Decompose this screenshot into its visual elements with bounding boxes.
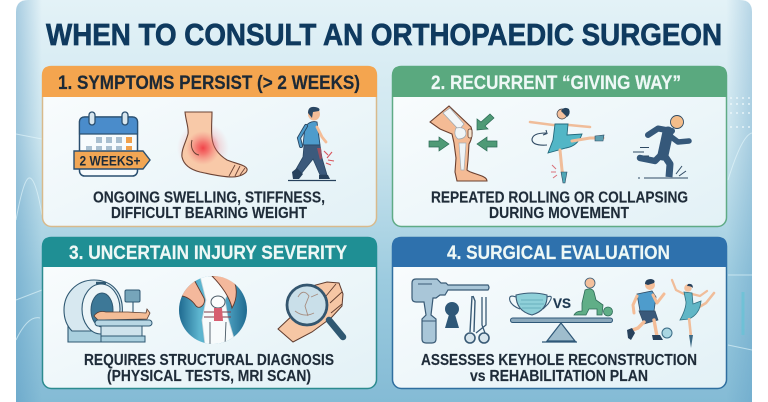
panel: surgical evaluation	[392, 237, 727, 388]
text: panel 2 caption	[431, 190, 688, 222]
icon: calendar	[74, 112, 150, 176]
heading: panel 4	[392, 237, 727, 267]
text: panel 1 caption: DIFFICULT BEARING WEIGHT	[111, 205, 307, 222]
icon: dancer	[672, 280, 714, 348]
icon: seesaw mask vs rehabilitation: VS	[553, 296, 571, 311]
heading: panel 1: 1. SYMPTOMS PERSIST (> 2 WEEKS)	[58, 72, 360, 94]
heading: panel 3	[42, 237, 377, 267]
icon: knee with arrows	[429, 106, 497, 181]
text: panel 2 caption: DURING MOVEMENT	[489, 205, 629, 222]
icon: limping person	[288, 107, 336, 180]
heading: panel 1	[42, 66, 377, 97]
icon: swollen ankle	[177, 112, 247, 177]
panel: recurrent giving way	[392, 66, 727, 226]
text: panel 1 caption	[93, 190, 325, 222]
icon: athlete with ball	[627, 279, 672, 340]
icon: MRI scanner	[64, 280, 152, 342]
icon: seesaw mask vs rehabilitation	[510, 278, 612, 342]
icon: magnifier over hand	[278, 282, 343, 342]
icon: running figure	[633, 116, 689, 178]
text: panel 3 caption: REQUIRES STRUCTURAL DIAGNOSIS	[84, 352, 334, 369]
text: panel 3 caption	[84, 352, 334, 385]
heading: panel 3: 3. UNCERTAIN INJURY SEVERITY	[69, 242, 347, 264]
heading: panel 2	[392, 66, 727, 97]
title: WHEN TO CONSULT AN ORTHOPAEDIC SURGEON	[46, 18, 722, 52]
icon: knee anatomy circle	[179, 274, 247, 345]
text: panel 4 caption: vs REHABILITATION PLAN	[470, 368, 648, 385]
heading: panel 2: 2. RECURRENT “GIVING WAY”	[431, 72, 681, 94]
panel: uncertain injury severity	[42, 237, 377, 388]
text: panel 3 caption: (PHYSICAL TESTS, MRI SCAN)	[107, 368, 311, 385]
icon: ballet dancer	[530, 108, 604, 183]
text: panel 4 caption: ASSESSES KEYHOLE RECONSTRUCTION	[421, 352, 697, 369]
text: panel 4 caption	[421, 352, 697, 385]
icon: calendar: 2 WEEKS+	[80, 152, 140, 168]
text: panel 1 caption: ONGOING SWELLING, STIFFNESS,	[93, 190, 325, 206]
panel: symptoms persist	[42, 66, 377, 226]
heading: panel 4: 4. SURGICAL EVALUATION	[447, 242, 670, 264]
text: panel 2 caption: REPEATED ROLLING OR COLLAPSING	[431, 190, 688, 206]
icon: arthroscope and instruments	[412, 279, 489, 343]
